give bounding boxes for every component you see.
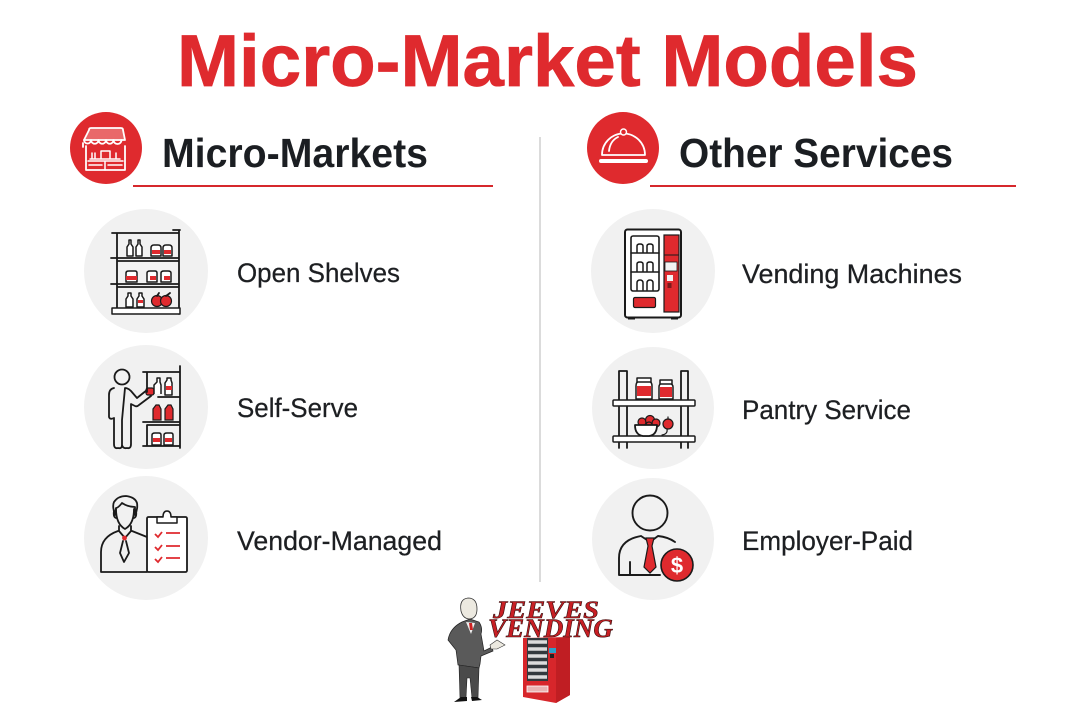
item: self-serve	[84, 345, 358, 469]
icon: cloche badge	[587, 112, 659, 184]
wordmark	[488, 597, 613, 643]
icon: employee with dollar badge	[619, 496, 693, 581]
icon: pantry shelf	[613, 371, 695, 448]
label: employer-paid: Employer-Paid	[742, 526, 913, 556]
heading: other services: Other Services	[679, 130, 953, 176]
item: pantry service	[592, 347, 911, 469]
illustration: butler	[448, 598, 505, 702]
panel: other services	[587, 112, 1016, 600]
label: vending machines: Vending Machines	[742, 259, 962, 289]
illustration: red vending machine	[523, 637, 570, 703]
icon: open shelves	[111, 230, 180, 314]
logo: jeeves vending	[448, 597, 613, 703]
icon: vending machine	[625, 230, 681, 320]
item: open shelves	[84, 209, 400, 333]
item: employer-paid	[592, 478, 913, 600]
label: vendor-managed: Vendor-Managed	[237, 526, 442, 556]
icon: manager with clipboard	[101, 496, 187, 572]
title: Micro-Market Models	[177, 21, 918, 102]
icon: employee with dollar badge: $	[671, 553, 683, 578]
wordmark: VENDING	[488, 614, 613, 643]
label: open shelves: Open Shelves	[237, 258, 400, 288]
icon: storefront badge	[70, 112, 142, 184]
icon: person at shelf	[109, 366, 180, 448]
label: self-serve: Self-Serve	[237, 393, 358, 423]
wordmark: JEEVES	[492, 597, 599, 624]
item: vending machines	[591, 209, 962, 333]
label: pantry service: Pantry Service	[742, 395, 911, 425]
item: vendor-managed	[84, 476, 442, 600]
heading: micro-markets: Micro-Markets	[162, 130, 428, 176]
panel: micro-markets	[70, 112, 493, 600]
